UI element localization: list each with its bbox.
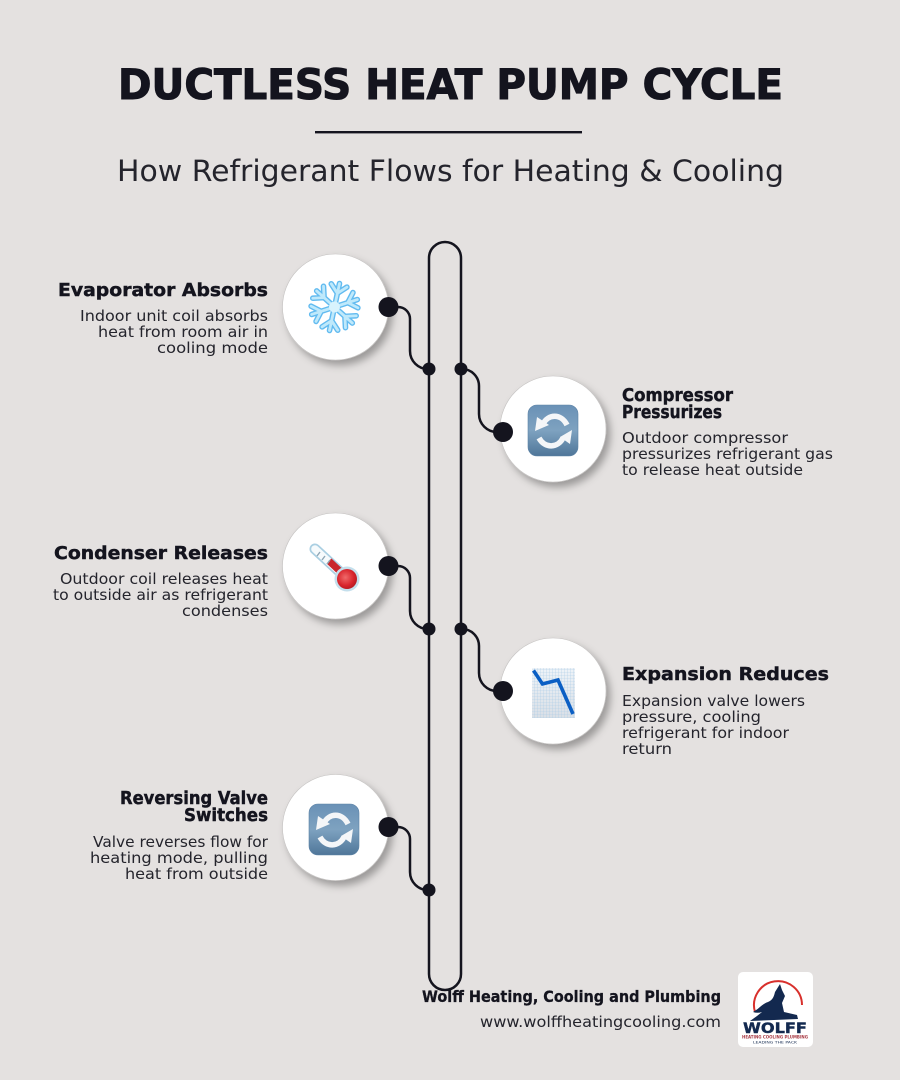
description: expansion: Expansion valve lowers — [622, 692, 805, 710]
icon: snowflake — [305, 278, 364, 336]
title: DUCTLESS HEAT PUMP CYCLE — [118, 60, 783, 109]
heading: expansion: Expansion Reduces — [622, 664, 829, 685]
description: reversing valve: heat from outside — [125, 865, 268, 883]
description: compressor: pressurizes refrigerant gas — [622, 445, 833, 463]
logo: Wolff: LEADING THE PACK — [753, 1040, 798, 1044]
icon: falling chart — [532, 668, 575, 718]
connector dot: compressor — [493, 422, 513, 442]
junction node: evaporator — [422, 362, 436, 376]
connector: condenser — [389, 566, 429, 629]
description: evaporator: heat from room air in — [98, 323, 268, 341]
heading: evaporator: Evaporator Absorbs — [58, 280, 268, 301]
panel: evaporator step — [58, 254, 436, 376]
connector dot: expansion — [493, 681, 513, 701]
subtitle: How Refrigerant Flows for Heating & Cooling — [117, 154, 784, 188]
logo: Wolff: WOLFF — [743, 1021, 807, 1037]
description: condenser: Outdoor coil releases heat — [60, 570, 268, 588]
description: compressor: Outdoor compressor — [622, 429, 789, 447]
heading: compressor: Compressor — [622, 385, 733, 406]
icon: cycle arrows — [528, 405, 578, 456]
central refrigerant loop track — [429, 242, 461, 990]
heading: reversing valve — [120, 788, 268, 826]
heading: reversing valve: Switches — [184, 805, 268, 826]
panel: expansion step — [454, 622, 829, 758]
description: reversing valve — [90, 833, 269, 883]
footer website: www.wolffheatingcooling.com — [480, 1013, 721, 1031]
panel: reversing valve step — [90, 774, 436, 896]
description: compressor — [622, 429, 833, 479]
heading: compressor: Pressurizes — [622, 402, 722, 423]
description: evaporator: Indoor unit coil absorbs — [80, 307, 268, 325]
node circle: evaporator — [282, 254, 388, 360]
heading: condenser: Condenser Releases — [54, 543, 268, 564]
connector dot: condenser — [378, 556, 398, 576]
description: expansion: refrigerant for indoor — [622, 724, 790, 742]
connector: reversing valve — [389, 827, 429, 890]
junction node: condenser — [422, 622, 436, 636]
logo: Wolff: HEATING COOLING PLUMBING — [742, 1034, 808, 1040]
description: condenser: condenses — [182, 602, 268, 620]
description: expansion: return — [622, 740, 672, 758]
icon: cycle arrows — [309, 804, 359, 855]
panel: condenser step — [53, 513, 436, 636]
connector: evaporator — [389, 307, 429, 369]
description: reversing valve: heating mode, pulling — [90, 849, 268, 867]
panel: compressor step — [454, 362, 833, 482]
icon: thermometer — [315, 549, 360, 592]
description: condenser: to outside air as refrigerant — [53, 586, 268, 604]
description: evaporator: cooling mode — [157, 339, 268, 357]
connector dot: reversing valve — [378, 817, 398, 837]
junction node: expansion — [454, 622, 468, 636]
junction node: compressor — [454, 362, 468, 376]
logo: Wolff — [738, 972, 813, 1047]
description: compressor: to release heat outside — [622, 461, 803, 479]
node circle: expansion — [500, 638, 606, 744]
connector: expansion — [461, 629, 503, 691]
footer company name: Wolff Heating, Cooling and Plumbing — [422, 987, 721, 1006]
heading: compressor — [622, 385, 733, 423]
description: condenser — [53, 570, 268, 620]
connector: compressor — [461, 369, 503, 432]
description: expansion — [622, 692, 805, 758]
heading: reversing valve: Reversing Valve — [120, 788, 268, 809]
node circle: condenser — [282, 513, 388, 619]
node circle: compressor — [500, 376, 606, 482]
description: expansion: pressure, cooling — [622, 708, 761, 726]
description: reversing valve: Valve reverses flow for — [93, 833, 269, 851]
junction node: reversing valve — [422, 884, 436, 896]
description: evaporator — [80, 307, 268, 357]
connector dot: evaporator — [378, 297, 398, 317]
node circle: reversing valve — [282, 774, 388, 880]
